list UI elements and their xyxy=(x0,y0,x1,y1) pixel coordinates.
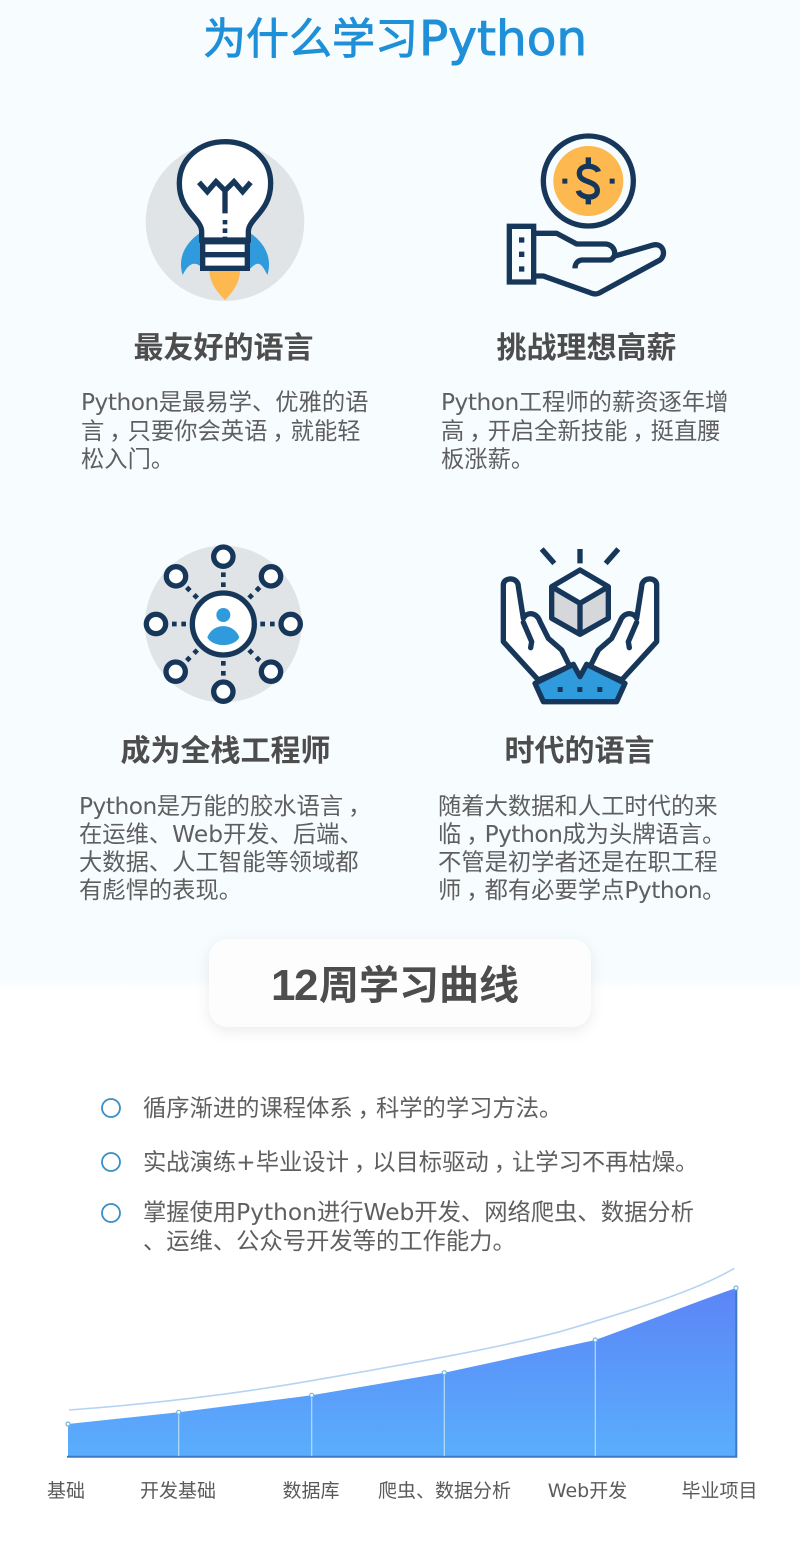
description: Python是万能的胶水语言， xyxy=(79,793,371,820)
panel: language of the era xyxy=(438,549,725,904)
axis labels: 数据库 xyxy=(282,1480,340,1502)
description: 大数据、人工智能等领域都 xyxy=(79,849,359,876)
panel: high salary xyxy=(441,136,728,473)
heading: 成为全栈工程师 xyxy=(120,726,330,770)
axis lines xyxy=(67,1288,737,1457)
description: Python工程师的薪资逐年增 xyxy=(441,389,728,416)
upper curve xyxy=(69,1268,734,1410)
icon: hand holding coin xyxy=(509,136,663,294)
panel: full stack xyxy=(79,546,371,904)
heading: 最友好的语言 xyxy=(134,323,314,367)
background panel xyxy=(0,0,800,990)
description: 不管是初学者还是在职工程 xyxy=(438,849,718,876)
bullet 1: 循序渐进的课程体系，科学的学习方法。 xyxy=(143,1095,562,1122)
heading: 12 week curve: 12 xyxy=(271,961,317,1010)
panel: friendly language xyxy=(81,142,368,473)
description: 随着大数据和人工时代的来 xyxy=(438,793,718,820)
bullet list xyxy=(102,1095,698,1255)
description: 师，都有必要学点Python。 xyxy=(438,877,725,904)
bullet 3 xyxy=(102,1199,694,1255)
axis labels: 开发基础 xyxy=(140,1480,216,1502)
description: 临，Python成为头牌语言。 xyxy=(438,821,725,848)
icon: light bulb rocket xyxy=(146,142,304,301)
description: 在运维、Web开发、后端、 xyxy=(79,821,363,848)
data points xyxy=(66,1286,738,1426)
area chart: learning curve xyxy=(66,1268,738,1457)
axis labels: 爬虫、数据分析 xyxy=(378,1480,511,1502)
description: 言，只要你会英语，就能轻 xyxy=(81,418,361,445)
icon: hands holding cube xyxy=(503,549,657,702)
panel: section heading card xyxy=(209,939,591,1027)
drop lines xyxy=(179,1340,595,1456)
title xyxy=(203,5,587,67)
description: 有彪悍的表现。 xyxy=(79,877,242,904)
title: Python xyxy=(419,11,587,67)
bullet 3: 掌握使用Python进行Web开发、网络爬虫、数据分析 xyxy=(143,1199,694,1226)
icon: network person xyxy=(145,546,302,702)
heading: 挑战理想高薪 xyxy=(496,323,676,367)
axis labels xyxy=(47,1480,758,1502)
description: 松入门。 xyxy=(81,446,174,473)
axis labels: 基础 xyxy=(47,1480,85,1502)
heading: 12 week curve: 周学习曲线 xyxy=(319,953,519,1011)
filled area xyxy=(68,1288,736,1457)
bullet 3: 、运维、公众号开发等的工作能力。 xyxy=(143,1228,516,1255)
axis labels: Web开发 xyxy=(548,1480,627,1502)
axis labels: 毕业项目 xyxy=(681,1480,758,1502)
title: 为什么学习 xyxy=(203,5,418,67)
bullet 2: 实战演练+毕业设计，以目标驱动，让学习不再枯燥。 xyxy=(143,1149,698,1176)
description: Python是最易学、优雅的语 xyxy=(81,389,368,416)
description: 高，开启全新技能，挺直腰 xyxy=(441,418,721,445)
description: 板涨薪。 xyxy=(441,446,534,473)
heading: 时代的语言 xyxy=(504,726,654,770)
